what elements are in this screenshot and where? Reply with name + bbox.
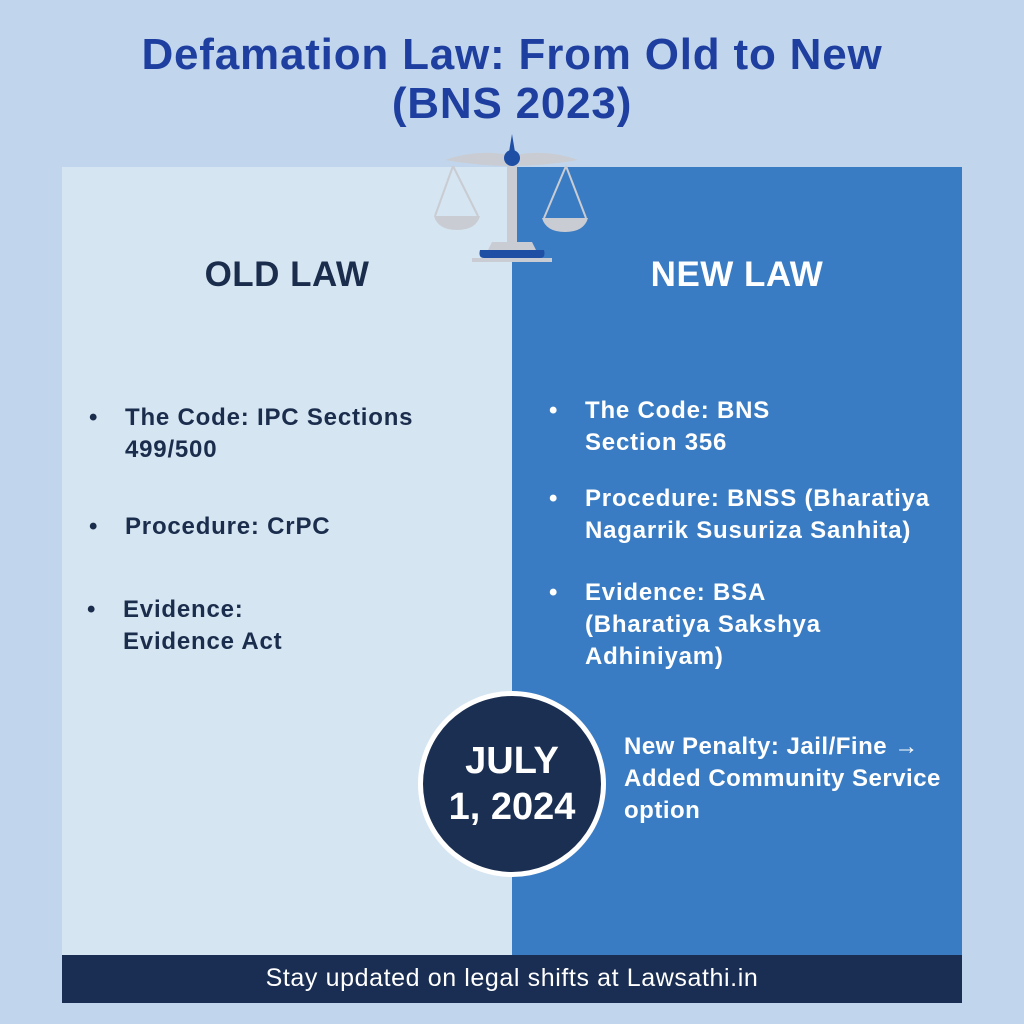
new bullet 3: Adhiniyam)	[585, 643, 724, 670]
heading: old law: OLD LAW	[205, 255, 369, 294]
panel: old law	[62, 167, 512, 955]
footer	[62, 955, 962, 1003]
heading: new law: NEW LAW	[651, 255, 823, 294]
date circle: 1, 2024	[449, 786, 575, 828]
old bullet 1: 499/500	[125, 436, 217, 463]
callout: new penalty: option	[624, 797, 700, 824]
new bullet 1: The Code: BNS	[585, 397, 770, 424]
old bullet 3: Evidence Act	[123, 628, 282, 655]
date circle	[418, 691, 606, 877]
new bullet 3: Evidence: BSA	[585, 579, 766, 606]
old bullet 3: Evidence:	[123, 596, 244, 623]
title	[141, 30, 883, 128]
old bullet 1: The Code: IPC Sections	[125, 404, 413, 431]
new bullet 2: Nagarrik Susuriza Sanhita)	[585, 517, 911, 544]
new bullet 1	[585, 395, 770, 459]
new bullet 2: Procedure: BNSS (Bharatiya	[585, 485, 930, 512]
old bullet 1	[125, 402, 413, 466]
footer: Stay updated on legal shifts at Lawsathi.in	[266, 964, 758, 992]
new bullet 1: Section 356	[585, 429, 727, 456]
old bullet 3	[123, 594, 282, 658]
icon: scales of justice	[434, 134, 588, 262]
date circle: JULY	[465, 740, 559, 782]
callout: new penalty: Added Community Service	[624, 765, 941, 792]
title: Defamation Law: From Old to New	[141, 30, 883, 79]
callout: new penalty: New Penalty: Jail/Fine →	[624, 733, 919, 760]
new bullet 3: (Bharatiya Sakshya	[585, 611, 821, 638]
callout: new penalty	[624, 733, 941, 824]
new bullet 3	[585, 577, 821, 673]
panel: new law	[512, 167, 962, 955]
title: (BNS 2023)	[392, 79, 632, 128]
new bullet 2	[585, 483, 930, 547]
old bullet 2: Procedure: CrPC	[125, 513, 330, 540]
